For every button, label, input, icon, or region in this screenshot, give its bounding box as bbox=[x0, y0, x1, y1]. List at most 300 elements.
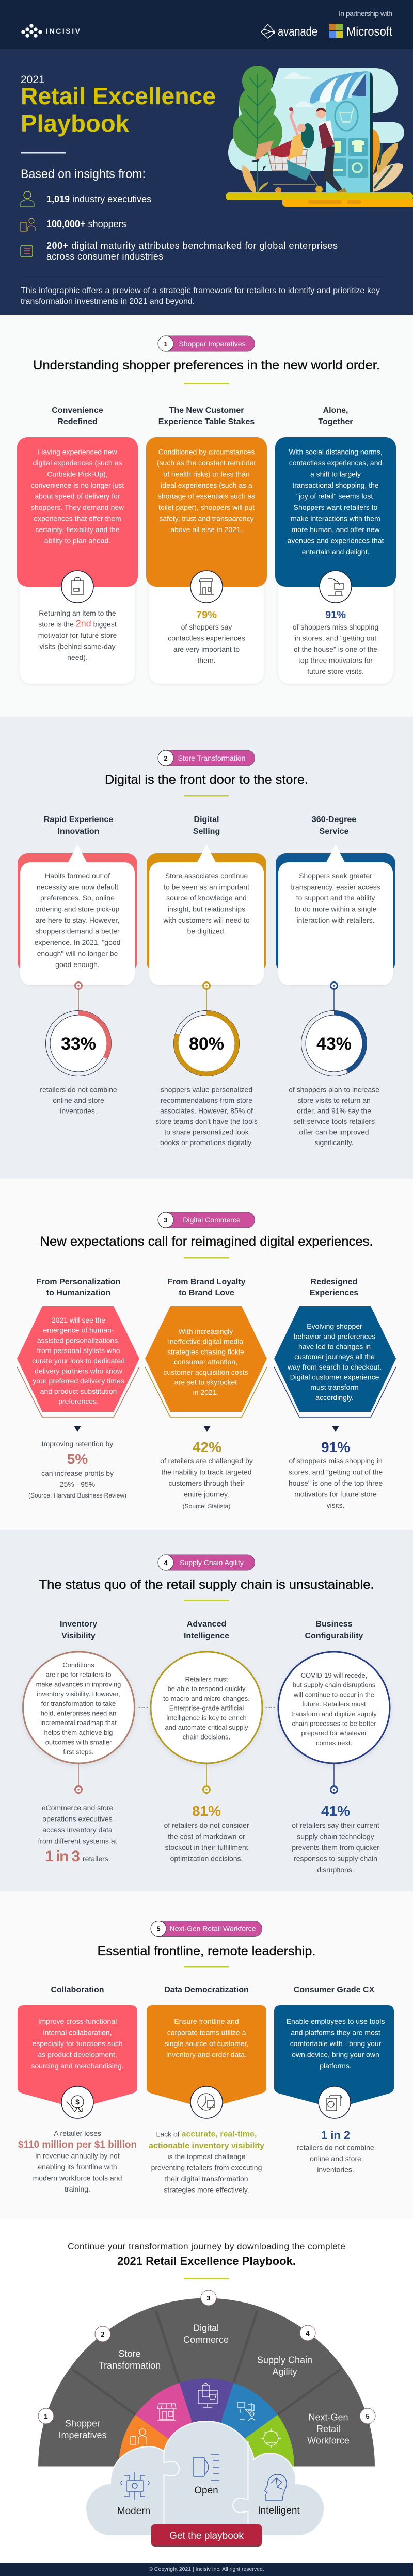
panel: redesigned experiences hexagon: of shoppers miss shopping in bbox=[289, 1457, 383, 1465]
panel: inventory visibility: retailers. bbox=[83, 1855, 110, 1863]
panel: convenience redefined: Curbside Pick-Up), bbox=[47, 470, 108, 478]
chart: semicircle framework: Next-Gen bbox=[308, 2412, 348, 2422]
title: Playbook bbox=[21, 110, 129, 137]
panel: redesigned experiences hexagon bbox=[274, 1306, 396, 1509]
column titles: Innovation bbox=[58, 827, 99, 836]
button: get the playbook bbox=[151, 2524, 262, 2547]
panel: consumer grade cx: Enable employees to use tools bbox=[287, 2017, 385, 2025]
panel: advanced intelligence: and automate critical supply bbox=[165, 1724, 248, 1731]
chart: semicircle framework: Retail bbox=[316, 2424, 340, 2434]
donut chart: 33%: retailers do not combine bbox=[40, 1086, 117, 1094]
panel: inventory visibility: 1 in 3 bbox=[45, 1848, 80, 1865]
panel: alone, together: Shoppers want retailers to bbox=[294, 503, 378, 511]
partner logos: Avanade and Microsoft: In partnership with bbox=[339, 9, 392, 18]
section 2 header: Store Transformation bbox=[178, 754, 245, 762]
donut chart: 33%: 33% bbox=[61, 1034, 96, 1054]
panel: advanced intelligence: of retailers do not consider bbox=[164, 1821, 249, 1829]
panel: brand love hexagon: (Source: Statista) bbox=[183, 1503, 230, 1510]
panel: convenience redefined bbox=[17, 437, 138, 684]
cloud puzzle: modern, open, intelligent: Modern bbox=[117, 2506, 150, 2517]
panel: consumer grade cx: retailers do not combine bbox=[297, 2144, 374, 2152]
panel: collaboration: A retailer loses bbox=[54, 2129, 101, 2137]
insight: attributes: 200+ digital maturity attributes benchmarked for global enterprises bbox=[46, 240, 338, 251]
panel: rapid experience innovation bbox=[18, 844, 137, 985]
donut chart: 80%: recommendations from store bbox=[161, 1096, 252, 1104]
panel: alone, together: make interactions with them bbox=[291, 514, 380, 522]
panel: alone, together: of the house" is one of the bbox=[294, 645, 377, 653]
insight: executives bbox=[21, 191, 151, 207]
panel: digital selling: insight, but relationships bbox=[168, 905, 245, 913]
partner logos: Avanade and Microsoft: avanade bbox=[278, 25, 317, 39]
column titles: Alone, bbox=[323, 406, 348, 415]
panel: customer experience table stakes: (such as the constant reminder bbox=[157, 459, 256, 467]
donut chart: 80%: store teams don't have the tools bbox=[155, 1117, 258, 1125]
title bbox=[21, 74, 216, 154]
chart: semicircle framework: 5 bbox=[366, 2412, 370, 2420]
section 2 header: 2 bbox=[164, 754, 168, 762]
panel: advanced intelligence: Enterprise-grade artificial bbox=[169, 1704, 244, 1712]
panel: business configurability: comes next. bbox=[316, 1739, 352, 1747]
panel: data democratization: is the topmost challenge bbox=[168, 2152, 246, 2161]
donut chart: 43%: offer can be improved bbox=[299, 1128, 369, 1136]
panel: inventory visibility: access inventory data bbox=[42, 1826, 113, 1834]
panel: 360-degree service: to do more within a single bbox=[295, 905, 377, 913]
column titles: 360-Degree bbox=[312, 815, 356, 824]
panel: inventory visibility: eCommerce and store bbox=[42, 1804, 113, 1812]
chart: semicircle framework: Agility bbox=[272, 2366, 297, 2377]
chart: semicircle framework: 1 bbox=[44, 2412, 48, 2420]
column titles: Service bbox=[320, 827, 349, 836]
panel: alone, together: in stores, and "getting out bbox=[295, 634, 376, 642]
panel: redesigned experiences hexagon: 91% bbox=[321, 1439, 350, 1455]
panel: brand love hexagon: With increasingly bbox=[179, 1327, 233, 1335]
panel: collaboration: Improve cross-functional bbox=[38, 2017, 117, 2025]
panel: brand love hexagon: entire journey. bbox=[184, 1490, 229, 1499]
panel: business configurability: of retailers say their current bbox=[292, 1821, 379, 1829]
panel: data democratization: preventing retailers from executing bbox=[151, 2163, 262, 2171]
panel: advanced intelligence: be able to respond quickly bbox=[167, 1685, 246, 1693]
panel: customer experience table stakes: Conditioned by circumstances bbox=[158, 448, 255, 456]
section 1 header: 1 bbox=[164, 340, 168, 348]
column titles: The New Customer bbox=[169, 406, 244, 415]
panel: digital selling: with customers will need to bbox=[163, 916, 250, 924]
panel: inventory visibility bbox=[23, 1652, 134, 1865]
panel: redesigned experiences hexagon: visits. bbox=[326, 1501, 345, 1509]
panel: redesigned experiences hexagon: house" is one of the top three bbox=[289, 1479, 383, 1487]
panel: inventory visibility: inventory visibility. However, bbox=[37, 1690, 120, 1698]
cloud puzzle: modern, open, intelligent: Open bbox=[194, 2485, 218, 2496]
panel: convenience redefined: store is the 2nd biggest bbox=[38, 618, 117, 629]
panel: inventory visibility: helps them achieve big bbox=[44, 1729, 113, 1736]
chart: semicircle framework: Transformation bbox=[99, 2360, 161, 2371]
panel: inventory visibility: operations executives bbox=[42, 1814, 113, 1823]
panel: customer experience table stakes: safety, trust and transparency bbox=[159, 514, 254, 522]
panel: redesigned experiences hexagon: have led to changes in bbox=[298, 1342, 371, 1350]
panel: business configurability: supply chain technology bbox=[297, 1832, 374, 1840]
panel: rapid experience innovation: good enough. bbox=[55, 960, 100, 969]
panel: convenience redefined: motivator for future store bbox=[38, 631, 117, 639]
panel: data democratization: corporate teams utilize a bbox=[167, 2028, 246, 2036]
panel: rapid experience innovation: are here to stay. However, bbox=[36, 916, 119, 924]
logo: Incisiv: INCISIV bbox=[46, 27, 81, 35]
panel: inventory visibility: from different systems at bbox=[38, 1837, 117, 1845]
panel: rapid experience innovation: experience. In 2021, "good bbox=[35, 938, 120, 946]
panel: consumer grade cx: inventories. bbox=[317, 2165, 354, 2174]
column titles: Convenience bbox=[52, 406, 103, 415]
panel: rapid experience innovation: shoppers demand a better bbox=[35, 927, 120, 935]
panel: inventory visibility: incremental roadmap that bbox=[40, 1719, 117, 1727]
chart: semicircle framework: Store bbox=[118, 2349, 141, 2359]
column titles: Collaboration bbox=[51, 1986, 104, 1994]
column titles: Data Democratization bbox=[164, 1986, 249, 1994]
title: 2021 bbox=[21, 74, 45, 86]
panel: advanced intelligence bbox=[151, 1652, 262, 1863]
panel: personalization hexagon: 5% bbox=[67, 1451, 88, 1467]
partner logos: Avanade and Microsoft bbox=[261, 9, 392, 39]
closing call to action text: Continue your transformation journey by downloading the complete bbox=[68, 2241, 345, 2251]
column titles bbox=[52, 406, 353, 426]
panel: personalization hexagon: 2021 will see the bbox=[52, 1316, 105, 1324]
panel: consumer grade cx: platforms. bbox=[320, 2062, 352, 2070]
partner logos: Avanade and Microsoft: Microsoft bbox=[346, 25, 392, 39]
footer: © Copyright 2021 | Incisiv Inc. All right reserved. bbox=[149, 2566, 264, 2572]
column titles: Redesigned bbox=[311, 1278, 357, 1286]
panel: 360-degree service bbox=[276, 844, 395, 985]
panel: collaboration: especially for functions such bbox=[32, 2039, 123, 2048]
panel: alone, together: of shoppers miss shopping bbox=[293, 623, 378, 631]
section 5 header: Essential frontline, remote leadership. bbox=[97, 1944, 316, 1958]
donut chart: 43% bbox=[289, 983, 379, 1147]
panel: consumer grade cx: online and store bbox=[310, 2154, 361, 2163]
panel: data democratization: single source of customer, bbox=[165, 2039, 248, 2048]
section 5 header: Next-Gen Retail Workforce bbox=[169, 1925, 256, 1933]
panel: customer experience table stakes: 79% bbox=[196, 609, 217, 621]
donut chart: 80%: to share personalized look bbox=[164, 1128, 249, 1136]
insight: attributes: across consumer industries bbox=[46, 251, 163, 262]
section 3 header: 3 bbox=[164, 1216, 168, 1224]
panel: convenience redefined: visits (behind same-day bbox=[39, 642, 116, 650]
insights heading: Based on insights from: bbox=[21, 167, 146, 181]
column titles: Redefined bbox=[57, 417, 98, 426]
panel: customer experience table stakes: above all else in 2021. bbox=[170, 525, 243, 534]
panel: rapid experience innovation: ordering and store pick-up bbox=[36, 905, 120, 913]
panel: advanced intelligence: 81% bbox=[192, 1803, 221, 1819]
panel: brand love hexagon: customer acquisition costs bbox=[163, 1368, 248, 1376]
panel: business configurability: prevents them from quicker bbox=[292, 1843, 379, 1852]
column titles: Experiences bbox=[310, 1289, 358, 1297]
donut chart: 80%: books or promotions digitally. bbox=[160, 1138, 253, 1147]
panel: collaboration: $ bbox=[75, 2098, 80, 2106]
chart: semicircle framework: Imperatives bbox=[58, 2430, 107, 2440]
chart: semicircle framework bbox=[38, 2290, 375, 2467]
panel: alone, together: 91% bbox=[325, 609, 346, 621]
panel: consumer grade cx bbox=[274, 2005, 394, 2174]
panel: brand love hexagon: the inability to track targeted bbox=[161, 1468, 252, 1476]
panel: business configurability bbox=[278, 1652, 390, 1874]
button: get the playbook: Get the playbook bbox=[169, 2531, 244, 2541]
panel: brand love hexagon: in 2021. bbox=[193, 1388, 218, 1396]
panel: customer experience table stakes: of shoppers say bbox=[181, 623, 232, 631]
section 3 header: New expectations call for reimagined digital experiences. bbox=[40, 1234, 373, 1249]
panel: digital selling bbox=[147, 844, 266, 985]
section 2 header bbox=[105, 750, 308, 797]
intro text bbox=[21, 286, 380, 306]
panel: collaboration: in revenue annually by not bbox=[35, 2152, 120, 2160]
panel: redesigned experiences hexagon: Evolving shopper bbox=[307, 1322, 362, 1330]
chart: semicircle framework: 4 bbox=[306, 2329, 310, 2337]
chart: semicircle framework: 3 bbox=[206, 2294, 211, 2302]
panel: inventory visibility: hold, enterprises need an bbox=[41, 1709, 116, 1717]
panel: consumer grade cx: own device, bring your own bbox=[292, 2051, 379, 2059]
panel: alone, together: contactless experiences, and bbox=[289, 459, 382, 467]
panel: digital selling: source of knowledge and bbox=[166, 894, 247, 902]
panel: customer experience table stakes: toilet paper), shoppers will put bbox=[158, 503, 255, 511]
insight: attributes bbox=[21, 240, 338, 262]
donut chart: 43%: store visits to return an bbox=[297, 1096, 371, 1104]
panel: brand love hexagon: of retailers are challenged by bbox=[160, 1457, 253, 1465]
donut chart: 33% bbox=[40, 983, 117, 1115]
panel: brand love hexagon: are set to skyrocket bbox=[174, 1378, 237, 1386]
column titles: Advanced bbox=[187, 1620, 226, 1629]
panel: consumer grade cx: and platforms they are most bbox=[291, 2028, 380, 2036]
panel: convenience redefined: convenience is no longer just bbox=[31, 481, 124, 489]
panel: customer experience table stakes: of health risks) or less than bbox=[163, 470, 250, 478]
panel: brand love hexagon: strategies chasing fickle bbox=[167, 1347, 244, 1356]
donut chart: 43%: significantly. bbox=[314, 1138, 354, 1147]
intro text: This infographic offers a preview of a strategic framework for retailers to identify and prioritize key bbox=[21, 286, 380, 295]
column titles bbox=[51, 1986, 375, 1994]
panel: redesigned experiences hexagon: behavior and preferences bbox=[294, 1332, 375, 1341]
cloud puzzle: modern, open, intelligent: Intelligent bbox=[258, 2505, 300, 2516]
panel: convenience redefined: digital experiences (such as bbox=[33, 459, 122, 467]
panel: convenience redefined: Having experienced new bbox=[38, 448, 118, 456]
column titles: From Personalization bbox=[37, 1278, 120, 1286]
panel: business configurability: chain processes to be better bbox=[292, 1719, 376, 1728]
panel: business configurability: transform and digitize supply bbox=[291, 1710, 377, 1718]
panel: 360-degree service: interaction with retailers. bbox=[297, 916, 374, 924]
panel: business configurability: responses to supply chain bbox=[294, 1855, 377, 1863]
panel: collaboration: sourcing and merchandising. bbox=[31, 2062, 124, 2070]
panel: data democratization: actionable inventory visibility bbox=[149, 2142, 264, 2150]
panel: inventory visibility: Conditions bbox=[62, 1661, 94, 1669]
panel: digital selling: be digitized. bbox=[187, 927, 226, 935]
panel: customer experience table stakes: shortage of essentials such as bbox=[158, 492, 255, 501]
panel: collaboration: enabling its frontline with bbox=[38, 2163, 117, 2171]
panel: brand love hexagon bbox=[145, 1306, 267, 1510]
donut chart: 43%: of shoppers plan to increase bbox=[289, 1086, 379, 1094]
logo: Incisiv bbox=[21, 24, 81, 38]
section 4 header: Supply Chain Agility bbox=[180, 1558, 244, 1567]
column titles: Selling bbox=[193, 827, 220, 836]
donut chart: 80%: shoppers value personalized bbox=[161, 1086, 252, 1094]
panel: advanced intelligence: Retailers must bbox=[185, 1675, 228, 1683]
insight: executives: 1,019 industry executives bbox=[46, 194, 151, 204]
chart: semicircle framework: Shopper bbox=[65, 2418, 100, 2428]
panel: convenience redefined: need). bbox=[67, 653, 88, 662]
donut chart: 33%: online and store bbox=[53, 1096, 104, 1104]
panel: digital selling: Store associates continue bbox=[165, 872, 248, 880]
panel: customer experience table stakes: ideal experiences (such as a bbox=[161, 481, 252, 489]
panel: personalization hexagon: curate your look to dedicated bbox=[32, 1357, 125, 1365]
column titles: Rapid Experience bbox=[44, 815, 113, 824]
column titles: Business bbox=[315, 1620, 353, 1629]
panel: redesigned experiences hexagon: Digital customer experience bbox=[290, 1373, 379, 1381]
section 3 header bbox=[40, 1212, 373, 1258]
panel: inventory visibility: first steps. bbox=[63, 1748, 94, 1756]
panel: alone, together: entertain and delight. bbox=[302, 548, 369, 556]
panel: alone, together: With social distancing norms, bbox=[289, 448, 383, 456]
column titles: Together bbox=[318, 417, 353, 426]
donut chart: 43%: self-service tools retailers bbox=[293, 1117, 375, 1125]
panel: business configurability: disruptions. bbox=[317, 1865, 354, 1874]
closing call to action text: 2021 Retail Excellence Playbook. bbox=[117, 2255, 296, 2267]
donut chart: 80%: associates. However, 85% of bbox=[160, 1106, 253, 1115]
panel: personalization hexagon: assisted personalizations, bbox=[37, 1336, 120, 1344]
panel: 360-degree service: Shoppers seek greater bbox=[299, 872, 372, 880]
donut chart: 80%: 80% bbox=[189, 1034, 224, 1054]
panel: personalization hexagon: your preferred delivery times bbox=[33, 1377, 124, 1385]
column titles bbox=[60, 1620, 363, 1640]
panel: redesigned experiences hexagon: accordingly. bbox=[315, 1393, 354, 1402]
panel: alone, together: transactional shopping, the bbox=[292, 481, 379, 489]
panel: personalization hexagon: can increase profits by bbox=[41, 1469, 114, 1477]
panel: personalization hexagon: from personal stylists who bbox=[37, 1346, 120, 1355]
panel: alone, together: future store visits. bbox=[307, 667, 364, 675]
chart: semicircle framework: Supply Chain bbox=[257, 2355, 312, 2365]
panel: convenience redefined: experiences that offer them bbox=[34, 514, 121, 522]
column titles: Experience Table Stakes bbox=[158, 417, 255, 426]
donut chart: 80% bbox=[155, 983, 258, 1147]
panel: advanced intelligence: optimization decisions. bbox=[170, 1855, 243, 1863]
column titles: to Brand Love bbox=[179, 1289, 234, 1297]
panel: collaboration: internal collaboration, bbox=[43, 2028, 112, 2036]
panel: 360-degree service: to support and the ability bbox=[296, 894, 375, 902]
section 1 header bbox=[33, 336, 380, 384]
panel: personalization hexagon: Improving retention by bbox=[42, 1440, 113, 1448]
panel: business configurability: COVID-19 will recede, bbox=[301, 1671, 367, 1679]
panel: convenience redefined: ability to plan ahead. bbox=[44, 537, 110, 545]
panel: brand love hexagon: ineffective digital media bbox=[168, 1338, 243, 1346]
column titles bbox=[44, 815, 356, 836]
panel: data democratization bbox=[147, 2005, 266, 2194]
panel: collaboration bbox=[18, 2005, 137, 2193]
panel: inventory visibility: are ripe for retailers to bbox=[45, 1671, 112, 1679]
panel: data democratization: strategies more effectively. bbox=[164, 2186, 249, 2194]
panel: rapid experience innovation: preferences. So, online bbox=[40, 894, 115, 902]
chart: semicircle framework: Workforce bbox=[307, 2436, 350, 2446]
panel: business configurability: will continue to occur in the bbox=[293, 1691, 374, 1698]
panel: consumer grade cx: 1 in 2 bbox=[321, 2129, 350, 2142]
illustration: shoppers at phone store bbox=[226, 66, 413, 207]
column titles: Consumer Grade CX bbox=[294, 1986, 375, 1994]
footer bbox=[0, 2563, 413, 2576]
panel: advanced intelligence: chain decisions. bbox=[183, 1733, 230, 1741]
panel: advanced intelligence: the cost of markdown or bbox=[168, 1832, 245, 1840]
panel: business configurability: but supply chain disruptions bbox=[293, 1681, 376, 1689]
panel: brand love hexagon: customers through their bbox=[168, 1479, 245, 1487]
panel: advanced intelligence: stockout in their fulfillment bbox=[165, 1843, 248, 1852]
panel: brand love hexagon: 42% bbox=[193, 1439, 221, 1455]
panel: advanced intelligence: to macro and micro changes. bbox=[163, 1695, 250, 1702]
panel: data democratization: inventory and order data. bbox=[166, 2051, 247, 2059]
section 4 header: The status quo of the retail supply chain is unsustainable. bbox=[39, 1577, 374, 1592]
panel: inventory visibility: outcomes with smaller bbox=[45, 1738, 112, 1746]
panel: redesigned experiences hexagon: customer journeys all the bbox=[294, 1353, 375, 1361]
panel: digital selling: to be seen as an important bbox=[164, 882, 249, 891]
section 4 header: 4 bbox=[164, 1559, 168, 1567]
panel: data democratization: Lack of accurate, real-time, bbox=[156, 2130, 257, 2138]
panel: redesigned experiences hexagon: way from search to checkout. bbox=[287, 1363, 382, 1371]
chart: semicircle framework: Digital bbox=[193, 2323, 219, 2333]
panel: inventory visibility: for transformation to take bbox=[41, 1700, 116, 1708]
section 2 header: Digital is the front door to the store. bbox=[105, 772, 308, 787]
panel: rapid experience innovation: necessity are now default bbox=[37, 882, 118, 891]
panel: collaboration: as product development, bbox=[38, 2051, 117, 2059]
panel: business configurability: 41% bbox=[321, 1803, 350, 1819]
section 4 header bbox=[39, 1555, 374, 1601]
insight: shoppers: 100,000+ shoppers bbox=[46, 219, 126, 229]
section 5 header bbox=[97, 1921, 316, 1967]
column titles: to Humanization bbox=[46, 1289, 110, 1297]
panel: redesigned experiences hexagon: stores, and "getting out of the bbox=[289, 1468, 383, 1476]
intro text: transformation investments in 2021 and beyond. bbox=[21, 297, 195, 306]
section 5 header: 5 bbox=[156, 1925, 161, 1933]
panel: collaboration: modern workforce tools and bbox=[33, 2174, 122, 2182]
panel: customer experience table stakes: contactless experiences bbox=[168, 634, 245, 642]
panel: alone, together bbox=[275, 437, 396, 684]
panel: alone, together: top three motivators for bbox=[298, 656, 373, 665]
closing call to action text bbox=[68, 2241, 345, 2279]
panel: redesigned experiences hexagon: motivators for future store bbox=[294, 1490, 377, 1499]
panel: personalization hexagon: delivery partners who know bbox=[35, 1366, 123, 1375]
panel: business configurability: prepared for whatever bbox=[301, 1729, 367, 1737]
panel: personalization hexagon: 25% - 95% bbox=[60, 1480, 95, 1488]
panel: rapid experience innovation: Habits formed out of bbox=[45, 872, 110, 880]
panel: customer experience table stakes: them. bbox=[197, 656, 216, 665]
panel: personalization hexagon bbox=[17, 1306, 139, 1499]
panel: alone, together: more human, and offer new bbox=[292, 525, 380, 534]
panel: alone, together: avenues and experiences that bbox=[288, 537, 384, 545]
column titles: Visibility bbox=[61, 1632, 96, 1640]
panel: personalization hexagon: and product substitution bbox=[40, 1387, 117, 1395]
panel: collaboration: $110 million per $1 billion bbox=[18, 2139, 137, 2150]
column titles: Inventory bbox=[60, 1620, 97, 1629]
chart: semicircle framework: 2 bbox=[101, 2330, 105, 2338]
section 3 header: Digital Commerce bbox=[183, 1216, 241, 1224]
panel: personalization hexagon: emergence of human- bbox=[43, 1326, 114, 1334]
donut chart: 33%: inventories. bbox=[60, 1106, 97, 1115]
section 1 header: Shopper Imperatives bbox=[179, 340, 246, 348]
title: Retail Excellence bbox=[21, 83, 216, 109]
chart: semicircle framework: Commerce bbox=[183, 2335, 229, 2345]
donut chart: 43%: order, and 91% say the bbox=[297, 1106, 371, 1115]
panel: collaboration: training. bbox=[65, 2185, 90, 2193]
panel: convenience redefined: about speed of delivery for bbox=[35, 492, 120, 501]
panel: personalization hexagon: preferences. bbox=[58, 1397, 99, 1406]
panel: rapid experience innovation: enough" will no longer be bbox=[37, 949, 118, 958]
column titles bbox=[37, 1278, 358, 1297]
panel: 360-degree service: transparency, easier access bbox=[291, 882, 380, 891]
section 1 header: Understanding shopper preferences in the new world order. bbox=[33, 358, 380, 373]
panel: inventory visibility: make advances in improving bbox=[36, 1680, 121, 1688]
panel: data democratization: Ensure frontline and bbox=[174, 2017, 239, 2025]
panel: personalization hexagon: (Source: Harvard Business Review) bbox=[28, 1492, 126, 1499]
panel: customer experience table stakes: are very important to bbox=[173, 645, 240, 653]
panel: convenience redefined: certainty, flexibility and the bbox=[35, 525, 120, 534]
insight: shoppers bbox=[21, 218, 126, 231]
column titles: From Brand Loyalty bbox=[167, 1278, 246, 1286]
panel: brand love hexagon: consumer attention, bbox=[174, 1358, 237, 1366]
